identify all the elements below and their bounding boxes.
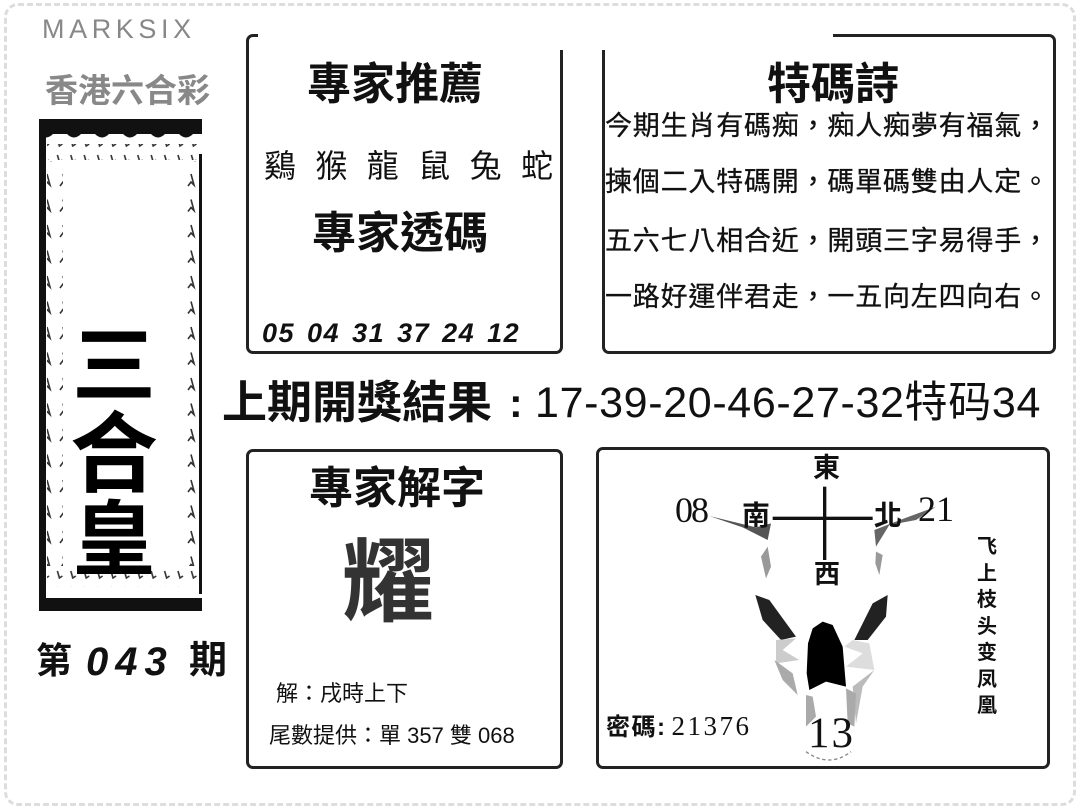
nose cavity — [807, 622, 846, 690]
issue number — [36, 640, 227, 684]
compass north: 北 — [874, 500, 902, 531]
title character 1: 三 — [72, 299, 156, 420]
panel: expert picks — [246, 34, 563, 354]
skull — [709, 507, 936, 760]
results label: 上期開獎結果 — [222, 377, 492, 428]
compass and skull drawing — [710, 486, 936, 761]
panel: compass and skull — [596, 447, 1050, 769]
eye shadows — [755, 595, 796, 640]
number right: 21 — [918, 489, 954, 529]
compass east: 東 — [813, 453, 840, 483]
issue digits: 043 — [86, 640, 174, 684]
compass south: 南 — [742, 500, 770, 531]
banner title — [70, 299, 158, 592]
subtitle: 香港六合彩 — [45, 72, 210, 109]
cheeks — [774, 660, 798, 695]
number bottom: 13 — [808, 710, 855, 757]
issue suffix: 期 — [189, 640, 227, 682]
vertical phrase: 飞上枝头变凤凰 — [977, 536, 997, 717]
clue explanation: 解：戌時上下 — [276, 681, 408, 706]
poem heading: 特碼詩 — [767, 60, 899, 109]
panel: poem — [602, 34, 1056, 354]
heading: word clue: 專家解字 — [309, 464, 485, 513]
results numbers: 17-39-20-46-27-32特码34 — [535, 379, 1041, 427]
last draw results — [222, 377, 1041, 428]
clue character: 耀 — [342, 532, 434, 634]
title character 3: 皇 — [73, 473, 155, 592]
zodiac picks: 鷄猴龍鼠兔蛇 — [264, 148, 572, 184]
banner frame and pattern — [39, 119, 202, 611]
heading: expert numbers: 專家透碼 — [312, 209, 488, 258]
number picks: 05 04 31 37 24 12 — [262, 318, 520, 348]
heading: expert picks: 專家推薦 — [307, 60, 483, 109]
brand text: MARKSIX — [42, 14, 196, 44]
poem line 2: 揀個二入特碼開，碼單碼雙由人定。 — [605, 167, 1050, 197]
secret code: 密碼:21376 — [606, 711, 752, 741]
number left: 08 — [675, 490, 707, 530]
tail numbers: 尾數提供：單 357 雙 068 — [269, 723, 515, 748]
compass cross — [773, 487, 873, 560]
results colon: : — [509, 380, 523, 426]
poem line 3: 五六七八相合近，開頭三字易得手， — [605, 226, 1050, 256]
panel: word clue — [246, 449, 563, 769]
title character 2: 合 — [70, 384, 158, 511]
issue prefix: 第 — [36, 640, 72, 681]
compass west: 西 — [814, 559, 840, 589]
snout — [806, 695, 816, 727]
poem line 1: 今期生肖有碼痴，痴人痴夢有福氣， — [605, 111, 1050, 141]
poem line 4: 一路好運伴君走，一五向左四向右。 — [605, 282, 1050, 312]
horns — [709, 516, 771, 540]
panel: vertical banner — [39, 119, 202, 611]
